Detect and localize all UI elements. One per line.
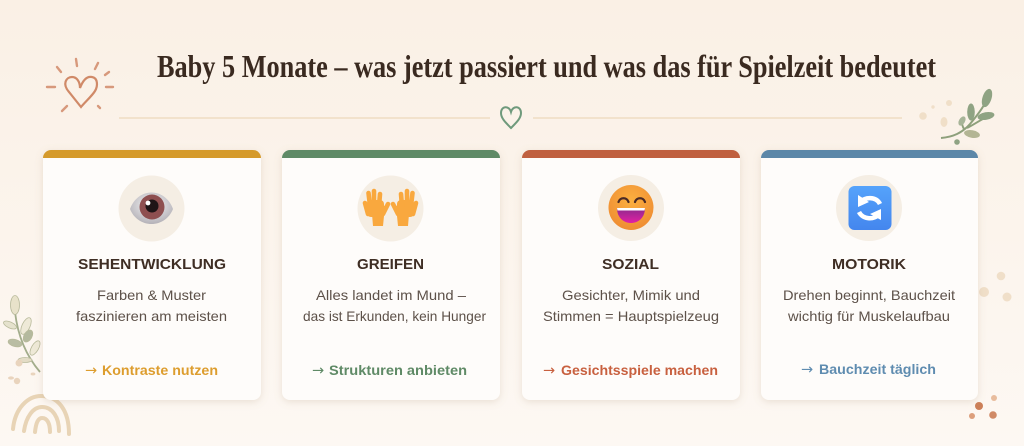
card background bbox=[282, 150, 500, 400]
action: Bauchzeit täglich bbox=[819, 361, 936, 377]
action: Strukturen anbieten bbox=[329, 362, 467, 378]
icon: laughing face bbox=[598, 175, 664, 241]
panel: Sehentwicklung bbox=[43, 150, 261, 400]
card background bbox=[761, 150, 978, 400]
card top bar bbox=[43, 150, 261, 158]
decoration: leaf sprig top right bbox=[919, 88, 995, 145]
description: faszinieren am meisten bbox=[76, 308, 227, 324]
card top bar bbox=[522, 150, 740, 158]
divider with heart bbox=[119, 107, 902, 128]
description: das ist Erkunden, kein Hunger bbox=[303, 308, 486, 324]
panel: Greifen bbox=[282, 150, 500, 400]
description: wichtig für Muskelaufbau bbox=[787, 308, 950, 324]
heading: SEHENTWICKLUNG bbox=[78, 256, 226, 273]
description bbox=[303, 287, 486, 324]
description bbox=[543, 287, 719, 324]
description: Farben & Muster bbox=[97, 287, 206, 303]
card background bbox=[522, 150, 740, 400]
decoration: rainbow bbox=[13, 396, 69, 434]
description: Drehen beginnt, Bauchzeit bbox=[783, 287, 955, 303]
icon: repeat arrows bbox=[836, 175, 902, 241]
decoration: heart with rays bbox=[47, 59, 113, 111]
decoration: terracotta dots bbox=[969, 395, 997, 419]
description: Gesichter, Mimik und bbox=[562, 287, 700, 303]
description bbox=[76, 287, 227, 324]
action: → bbox=[312, 363, 324, 379]
card top bar bbox=[761, 150, 978, 158]
action: Kontraste nutzen bbox=[102, 362, 218, 378]
action: Gesichtsspiele machen bbox=[561, 362, 718, 378]
panel: Motorik bbox=[761, 150, 978, 400]
decoration: beige dots right bbox=[979, 272, 1012, 302]
icon: eye bbox=[118, 176, 184, 242]
description: Alles landet im Mund – bbox=[316, 287, 466, 303]
action: → bbox=[85, 363, 97, 379]
heading: SOZIAL bbox=[602, 256, 659, 273]
icon: raised hands bbox=[358, 176, 424, 242]
action: → bbox=[801, 362, 813, 378]
action: → bbox=[543, 363, 555, 379]
decoration: leaf sprig left bbox=[2, 296, 42, 384]
heading: GREIFEN bbox=[357, 256, 424, 273]
card top bar bbox=[282, 150, 500, 158]
description bbox=[783, 287, 955, 324]
description: Stimmen = Hauptspielzeug bbox=[543, 308, 719, 324]
heading: MOTORIK bbox=[832, 256, 906, 273]
panel: Sozial bbox=[522, 150, 740, 400]
card background bbox=[43, 150, 261, 400]
